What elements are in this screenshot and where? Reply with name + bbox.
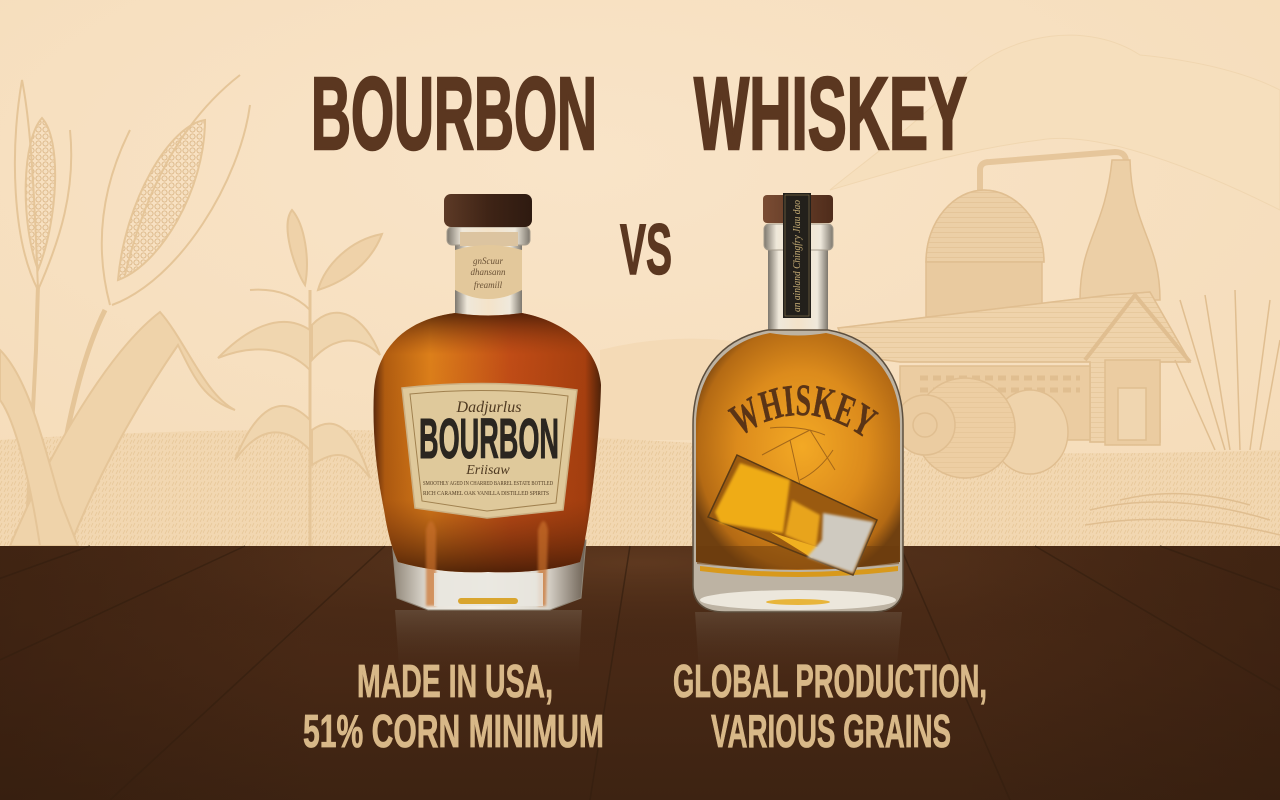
lip (447, 227, 530, 245)
black strip label (783, 193, 811, 318)
corn ear: large (50, 75, 250, 546)
base glass (392, 540, 586, 610)
main label (402, 383, 577, 518)
caption: bourbon: 51% CORN MINIMUM (303, 705, 604, 757)
wood table (0, 546, 1280, 800)
lip and cork (764, 224, 833, 250)
caption: whiskey: VARIOUS GRAINS (711, 705, 951, 757)
cork (460, 232, 518, 246)
tilted glass (708, 455, 877, 575)
base sheen (700, 590, 896, 610)
curved label text: WHISKEY (727, 385, 879, 437)
engraving: field texture (0, 339, 1280, 546)
heading: BOURBON: BOURBON (311, 56, 597, 171)
sketch (762, 427, 835, 485)
main label: RICH CARAMEL OAK VANILLA DISTILLED SPIRITS (423, 490, 549, 497)
whiskey liquid (696, 333, 900, 570)
hay bales (895, 378, 1068, 478)
heading: VS: VS (620, 211, 672, 290)
still pots (926, 152, 1160, 317)
caption: bourbon: MADE IN USA, (357, 655, 553, 707)
black strip label: an ainland Chingfry Jlau dao (792, 200, 803, 312)
corn leaves (10, 312, 235, 546)
main label: SMOOTHLY AGED IN CHARRED BARREL ESTATE BOTTLED (423, 480, 553, 487)
main label: BOURBON (419, 407, 559, 471)
bourbon liquid (373, 313, 601, 572)
engraving: clouds (830, 35, 1280, 210)
barn (838, 292, 1190, 445)
reeds right (1175, 290, 1280, 450)
caption: bourbon (303, 655, 604, 757)
bottle: whiskey (692, 193, 904, 642)
ground swirls (1085, 494, 1280, 535)
neck label: dhansann (470, 267, 506, 277)
background: parchment (0, 0, 1280, 546)
heading: WHISKEY: WHISKEY (694, 56, 967, 171)
cap (763, 195, 833, 223)
main label: Dadjurlus (456, 399, 521, 416)
neck (768, 240, 828, 332)
corn ear: small (15, 80, 71, 546)
engraving: corn stalks left (0, 75, 382, 546)
cap (444, 194, 532, 227)
curved label text (727, 385, 879, 437)
engraving: still and barn (838, 152, 1280, 535)
caption: whiskey (673, 655, 987, 757)
reflection (395, 610, 582, 680)
plant centre (218, 210, 382, 546)
main label: Eriisaw (465, 463, 510, 478)
neck (455, 240, 522, 315)
reflection (695, 612, 902, 685)
neck label: gnScuur (473, 256, 503, 266)
neck label: freamill (474, 280, 503, 290)
caption: whiskey: GLOBAL PRODUCTION, (673, 655, 987, 707)
base notches (426, 521, 548, 606)
body glass (693, 330, 903, 612)
bottle: bourbon (373, 194, 601, 680)
neck label (455, 245, 522, 299)
